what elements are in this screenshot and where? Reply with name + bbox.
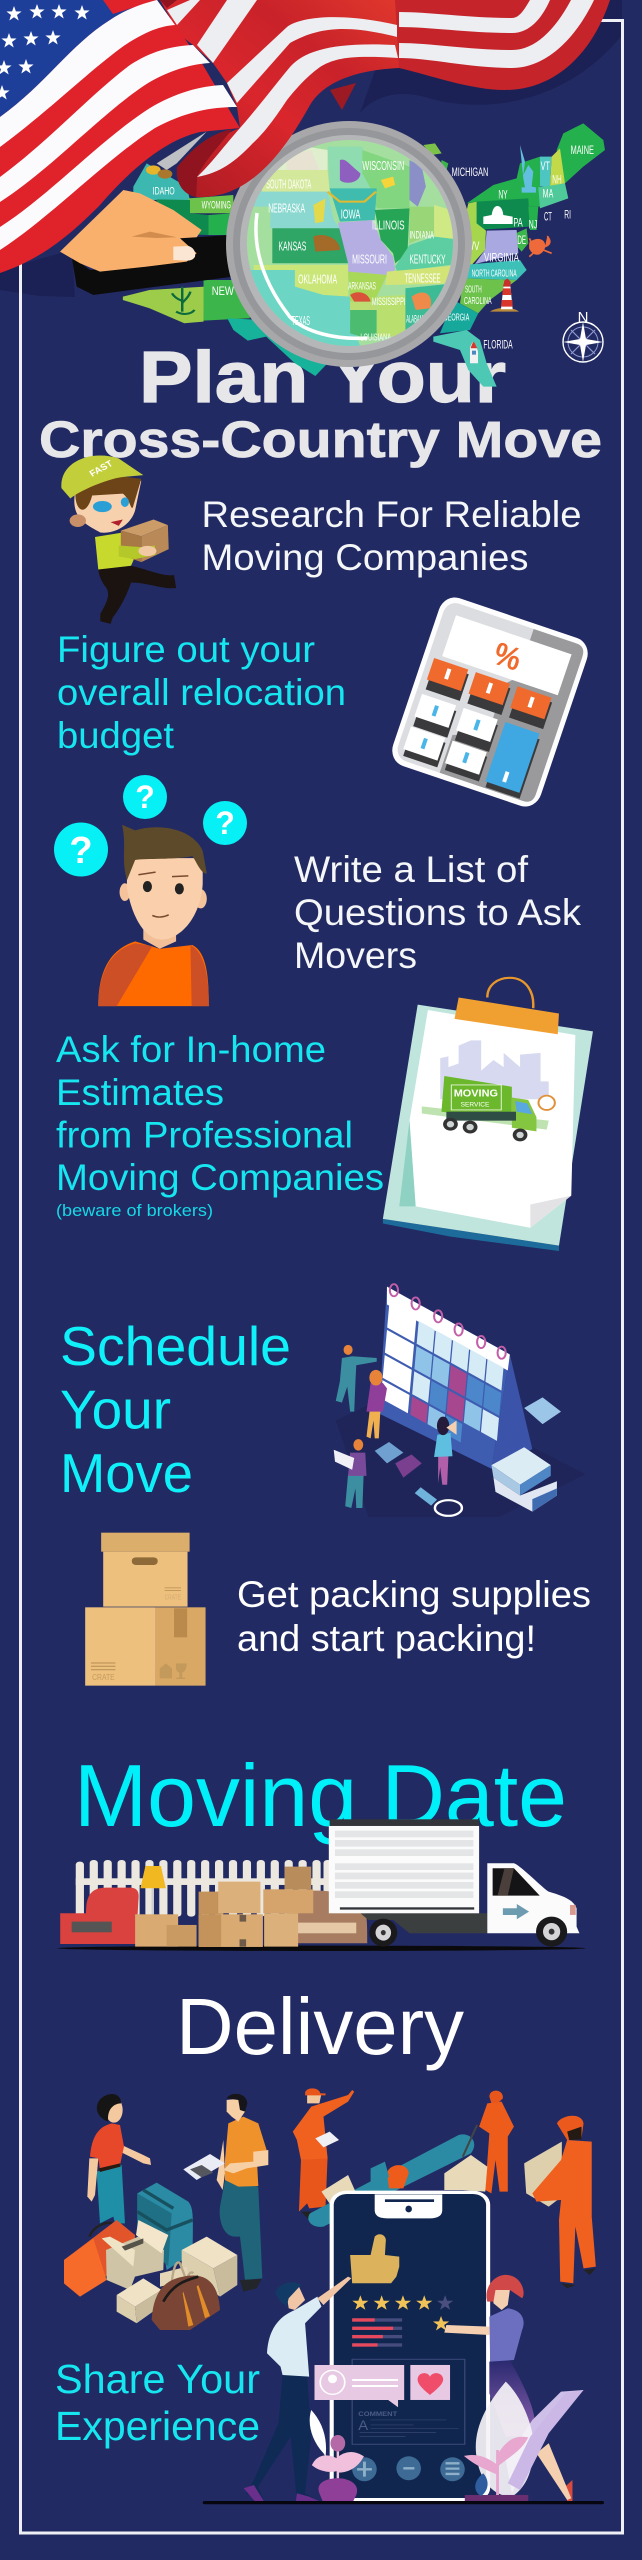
moving date heading: Moving Date (74, 1746, 567, 1845)
icon: clipboard with moving truck (383, 978, 593, 1251)
icon: statue of liberty (520, 145, 536, 193)
map: eastern states: NY (498, 187, 508, 201)
cardboard box front (117, 2278, 162, 2323)
step 5 text (60, 1315, 291, 1504)
comment box (352, 2359, 465, 2444)
icon: stacked cardboard boxes: CRATE (92, 1673, 115, 1683)
title: Cross-Country Move (39, 411, 602, 468)
man customer (183, 2094, 268, 2292)
sofa (287, 1891, 367, 1943)
map: eastern states: SOUTH (465, 285, 482, 296)
step 3 text: Write a List of (294, 849, 529, 890)
open cardboard box (102, 2220, 168, 2290)
step 2 text: budget (57, 715, 175, 756)
icon: capitol building (483, 206, 513, 224)
truck (441, 1076, 512, 1119)
review speech card (314, 2365, 404, 2407)
icon: calendar planning scene (334, 1284, 586, 1517)
lens map: MISSISSIPPI (372, 295, 405, 308)
mover carrying box (524, 2116, 596, 2288)
map: eastern states: NORTH CAROLINA (472, 269, 517, 280)
moving boxes (135, 1867, 313, 1947)
mover with handcart (444, 2091, 514, 2193)
step 4 text: Estimates (56, 1072, 224, 1113)
lens map: MISSOURI (352, 253, 387, 267)
map: eastern states (423, 123, 605, 387)
map: eastern states: DE (517, 233, 526, 247)
person pointing (336, 1345, 377, 1412)
map: eastern states: WV (467, 239, 479, 253)
white leaf (476, 2382, 533, 2497)
customers and luggage (64, 2094, 268, 2330)
map: eastern states: MAINE (571, 143, 594, 157)
step 2 text: overall relocation (57, 672, 346, 713)
step 3 text: Movers (294, 935, 417, 976)
map: eastern states: MICHIGAN (452, 165, 488, 179)
step 4 text (56, 1029, 384, 1220)
step 3 text: Questions to Ask (294, 892, 582, 933)
lens map: OKLAHOMA (298, 273, 337, 287)
movers and phone review scene (203, 2088, 604, 2504)
truck cargo box (329, 1819, 479, 1913)
lens map: KENTUCKY (410, 253, 446, 267)
icon: rocket (470, 342, 478, 363)
lens map: WISCONSIN (362, 159, 404, 174)
lens map: ILLINOIS (372, 219, 405, 233)
question bubbles (54, 775, 247, 876)
box behind phone (321, 2175, 356, 2207)
american flag (0, 0, 610, 273)
flag blue canton (0, 0, 157, 117)
map: western states: WYOMING (202, 199, 231, 211)
step 6 text: and start packing! (237, 1618, 536, 1659)
flag left panel (0, 0, 240, 273)
icon: stacked cardboard boxes (85, 1533, 206, 1686)
lens map: NEBRASKA (268, 202, 305, 216)
step 5 text: Your (60, 1378, 171, 1440)
step 1 text (202, 494, 582, 578)
step 6 text (237, 1574, 591, 1659)
step 1 text: Moving Companies (202, 537, 528, 578)
icon: lighthouse (490, 278, 519, 312)
orange suitcase (64, 2220, 135, 2297)
icon: clipboard with moving truck: MOVING (454, 1088, 498, 1099)
step 4 text: Ask for In-home (56, 1029, 326, 1070)
calendar grid (381, 1305, 503, 1461)
step 4 text: from Professional (56, 1114, 353, 1156)
small books (375, 1397, 561, 1478)
woman skirt fold (508, 2390, 584, 2490)
flag right panel (380, 0, 610, 90)
ground line (203, 2501, 604, 2504)
title: Plan Your (139, 338, 506, 418)
share your experience text: Share Your (55, 2356, 260, 2402)
step 4 text: (beware of brokers) (56, 1201, 213, 1220)
brown duffel bag (152, 2262, 220, 2330)
map: eastern states: PA (513, 216, 523, 230)
lens map: TEXAS (292, 314, 310, 329)
lens map: KANSAS (278, 240, 306, 254)
question bubbles: ? (135, 779, 155, 815)
flag shadow (0, 0, 622, 297)
map: eastern states: CAROLINA (464, 296, 492, 307)
icon: calculator (388, 593, 592, 811)
map: eastern states: NJ (529, 217, 537, 231)
truck chassis (360, 1913, 487, 1933)
map: western states (133, 132, 233, 235)
step 3 thinking person (98, 825, 209, 1006)
lens map: ALABAMA (406, 313, 426, 325)
map: western states: IDAHO (153, 185, 175, 197)
step 1 mover character: FAST (88, 458, 115, 479)
lens map (247, 140, 453, 346)
floor lamp (140, 1866, 166, 1944)
map: eastern states: FLORIDA (483, 338, 513, 352)
lens map: ARKANSAS (348, 279, 376, 292)
share your experience text: Experience (55, 2403, 260, 2449)
step 5 text: Move (60, 1442, 193, 1504)
magnifier (418, 1490, 462, 1516)
lens map: LOUISIANA (360, 333, 391, 343)
icon: clipboard with moving truck: SERVICE (461, 1100, 489, 1108)
map: eastern states: RI (564, 207, 571, 221)
potted plant right (465, 2438, 528, 2502)
teal rolled carpet (308, 2134, 474, 2227)
armchair (60, 1888, 139, 1944)
map: eastern states: VT (541, 159, 550, 173)
infographic canvas: NEW M (212, 284, 244, 298)
woman customer (87, 2094, 151, 2223)
step 5 text: Schedule (60, 1315, 291, 1377)
man reviewing (246, 2277, 351, 2502)
lens map: IOWA (341, 208, 361, 222)
step 4 text: Moving Companies (56, 1157, 384, 1198)
person at calendar (434, 1417, 457, 1485)
thumbs up (350, 2234, 399, 2283)
person with paper (334, 1439, 367, 1508)
picket fence (76, 1860, 338, 1918)
woman reviewing (444, 2275, 584, 2502)
map: eastern states: MA (543, 186, 553, 200)
calendar rings (390, 1284, 506, 1359)
phone (330, 2191, 490, 2502)
magnifying glass (226, 121, 472, 367)
icon: stacked cardboard boxes: CRATE (165, 1593, 181, 1601)
lens map: SOUTH DAKOTA (266, 178, 311, 192)
map: eastern states: CT (544, 210, 552, 224)
step 1 mover character (61, 456, 176, 624)
mover crouching behind phone (371, 2162, 409, 2193)
question bubbles: ? (69, 830, 93, 872)
flag stars (0, 4, 90, 100)
city skyline (440, 1040, 549, 1099)
share your experience text (55, 2356, 260, 2449)
man's shoes (244, 2485, 320, 2503)
map: eastern states: VIRGINIA (484, 251, 519, 265)
step 6 text: Get packing supplies (237, 1574, 591, 1615)
ground shadow (57, 1946, 586, 1951)
delivery heading: Delivery (176, 1982, 464, 2071)
icon: calculator: % (489, 635, 526, 678)
icon: crab (529, 236, 552, 257)
comment box: A (358, 2418, 369, 2434)
teal suitcase (137, 2183, 193, 2270)
flag middle ribbon (160, 0, 399, 197)
round buttons (352, 2456, 465, 2481)
lens map: TENNESSEE (405, 272, 441, 286)
rating stars (352, 2295, 453, 2330)
step 3 text (294, 849, 582, 976)
compass: N (578, 309, 588, 326)
lens map: INDIANA (410, 228, 434, 241)
map: eastern states: NH (552, 172, 562, 186)
truck cab (487, 1863, 579, 1933)
comment box: COMMENT (358, 2411, 398, 2418)
mover pointing (293, 2088, 354, 2220)
step 1 text: Research For Reliable (202, 494, 582, 535)
compass (563, 309, 603, 362)
question bubbles: ? (215, 805, 235, 841)
person with red hair (367, 1370, 387, 1438)
step 2 text (57, 629, 346, 756)
cardboard box right (182, 2237, 237, 2297)
map: eastern states: GEORGIA (443, 313, 470, 324)
rating bars (352, 2318, 402, 2347)
magnifier handle and hand (60, 190, 233, 295)
truck wheels (369, 1917, 567, 1947)
stacked books (491, 1447, 557, 1512)
step 2 text: Figure out your (57, 629, 315, 670)
title (39, 338, 602, 468)
moving day scene (57, 1819, 586, 1951)
heart card (410, 2365, 450, 2400)
potted plant left (310, 2410, 362, 2503)
